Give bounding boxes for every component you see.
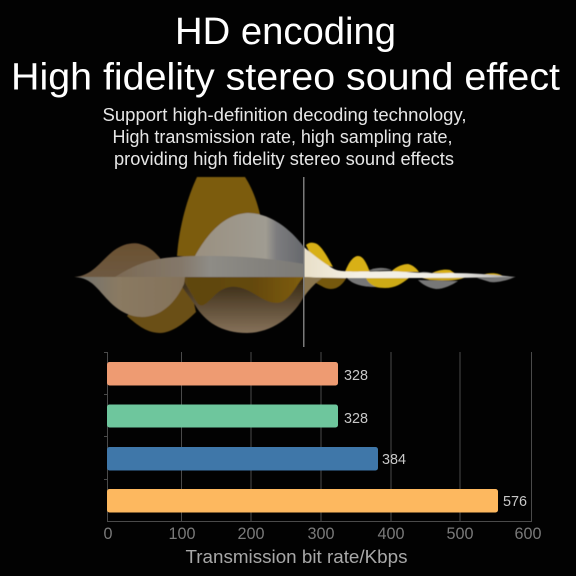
waveform: gold lower accent [182, 277, 304, 305]
waveform: tan edge under marker [304, 277, 322, 297]
waveform: grey right lobes [347, 268, 515, 289]
x axis tick labels: 300 [308, 524, 334, 543]
subtitle text block: High transmission rate, high sampling rate, [112, 126, 452, 147]
bar chart [104, 352, 542, 567]
chart gridlines and axes [104, 352, 532, 522]
waveform: grey upper hump [195, 213, 304, 277]
value label 328: 328 [344, 367, 368, 384]
title: HD encoding: HD encoding [175, 11, 396, 53]
value label 328: 328 [344, 410, 368, 427]
value label 384: 384 [382, 451, 406, 468]
waveform: dark gold lower lobe [127, 285, 196, 333]
value label 576: 576 [503, 493, 527, 510]
x axis tick labels: 600 [514, 524, 542, 543]
x axis title: Transmission bit rate/Kbps [186, 546, 408, 567]
waveform: bright yellow right lobes [304, 243, 504, 289]
x axis tick labels: 400 [378, 524, 404, 543]
waveform: brown lower lobe [176, 277, 304, 333]
x axis tick labels [104, 524, 542, 543]
x axis tick labels: 500 [446, 524, 474, 543]
waveform: grey lower left lobe [75, 277, 185, 317]
bar: 328 orange [107, 362, 338, 386]
subtitle text block: Support high-definition decoding technology, [102, 104, 466, 125]
bar: 384 blue [107, 447, 378, 470]
waveform: dark gold peak [177, 177, 262, 262]
subtitle text block [102, 104, 466, 169]
x axis tick labels: 200 [238, 524, 264, 543]
sound waveform graphic [74, 177, 516, 333]
x axis tick labels: 0 [104, 524, 112, 543]
waveform: brown left hump [74, 243, 160, 277]
bar: 576 yellow [107, 489, 498, 512]
waveform: white band right of marker [304, 247, 516, 278]
vertical marker line [303, 177, 304, 347]
title: High fidelity stereo sound effect: High fidelity stereo sound effect [11, 56, 560, 98]
bar: 328 green [107, 404, 338, 428]
x axis tick labels: 100 [168, 524, 196, 543]
subtitle text block: providing high fidelity stereo sound effects [114, 148, 454, 169]
waveform: grey horizon band [115, 256, 304, 277]
